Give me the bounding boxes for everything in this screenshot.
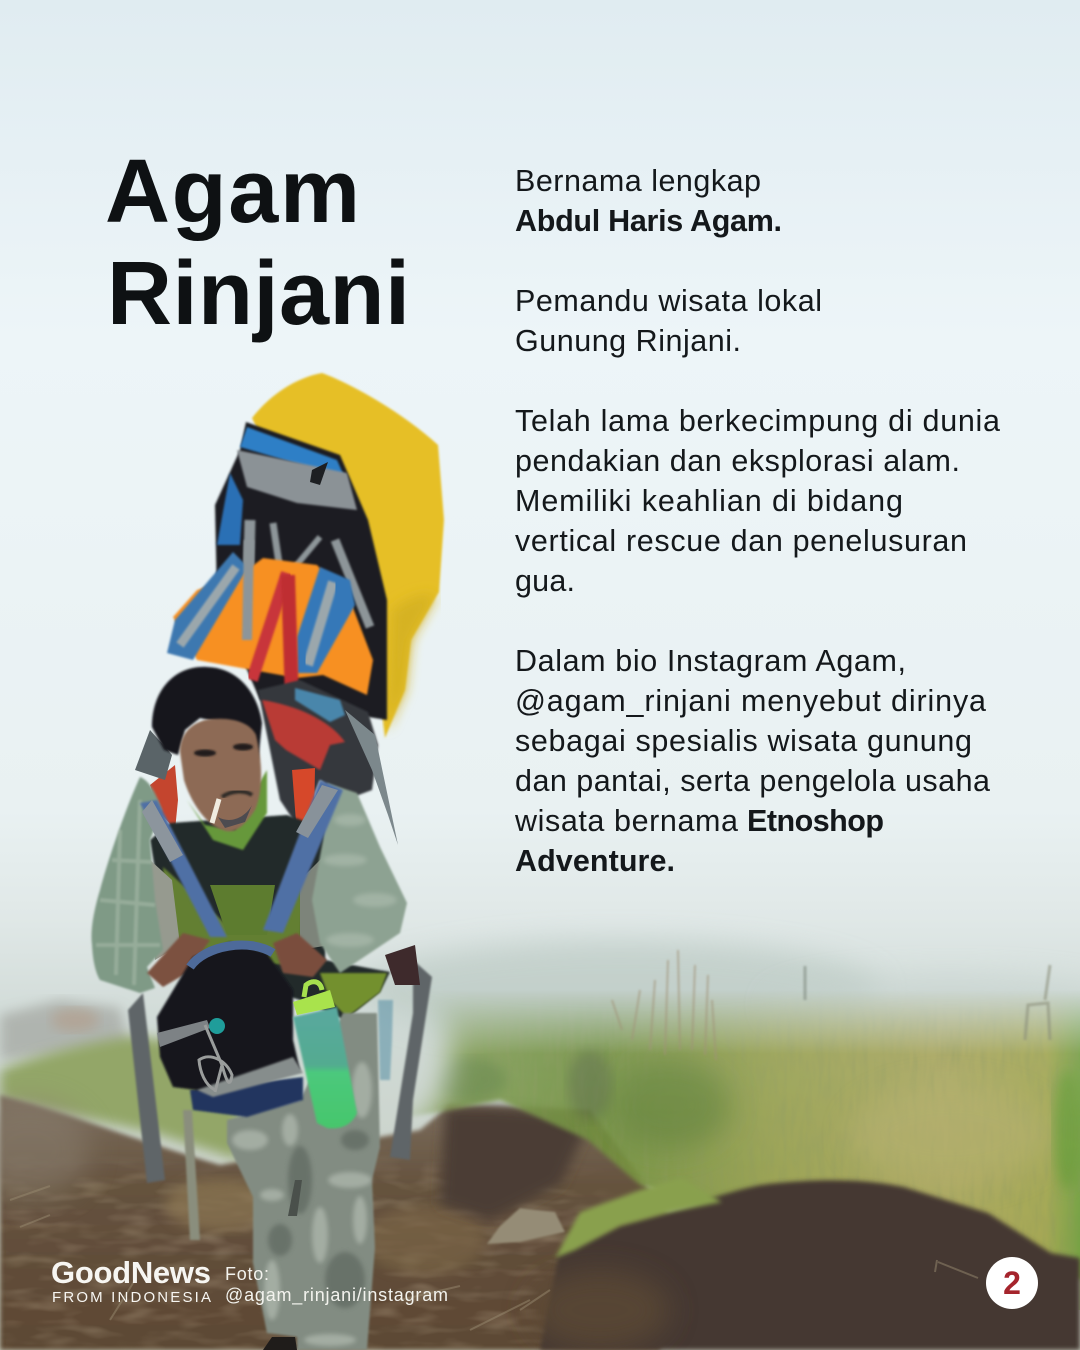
- distant trees: [0, 1000, 130, 1060]
- text block: full name: Abdul Haris Agam.: [515, 204, 782, 238]
- lower pack: [258, 680, 378, 830]
- text block: local guide: [515, 284, 822, 358]
- text block: full name: [515, 164, 782, 238]
- logo: GoodNews from Indonesia: GoodNews: [51, 1255, 211, 1290]
- left grass: [0, 1036, 240, 1160]
- cigarette: [212, 799, 219, 823]
- padded blue straps: [167, 552, 248, 660]
- text block: instagram bio: dan pantai, serta pengelola usaha: [515, 764, 990, 798]
- grass tuft: [555, 1178, 722, 1258]
- logo: GoodNews from Indonesia: FROM INDONESIA: [52, 1289, 211, 1306]
- text block: instagram bio: sebagai spesialis wisata gunung: [515, 724, 972, 758]
- hands: [147, 933, 210, 987]
- dry stalks: [612, 950, 1050, 1060]
- photo credit: [225, 1264, 448, 1306]
- text block: instagram bio: [514, 644, 990, 878]
- grey straps: [247, 520, 370, 640]
- background: mountain trail landscape: [0, 940, 1080, 1350]
- person in the background: [378, 1000, 393, 1080]
- upper pack body: [215, 422, 387, 720]
- text block: experience: [515, 404, 1000, 598]
- yellow rain cover: [252, 373, 444, 738]
- waist pack: [190, 1077, 303, 1117]
- text block: experience: gua.: [515, 564, 575, 598]
- main grass field: [400, 980, 1080, 1320]
- text block: instagram bio: Adventure.: [515, 844, 675, 878]
- fog bank: [360, 940, 880, 1040]
- title: [105, 142, 410, 344]
- rocks and twigs: [487, 1208, 565, 1244]
- text block: local guide: Gunung Rinjani.: [515, 324, 741, 358]
- page number badge: [986, 1257, 1038, 1309]
- photo: hiker with giant backpack: [91, 373, 444, 1350]
- text block: instagram bio: @agam_rinjani menyebut dirinya: [515, 684, 986, 718]
- text block: experience: vertical rescue dan penelusuran: [515, 524, 967, 558]
- text block: experience: Memiliki keahlian di bidang: [515, 484, 903, 518]
- shoe: [263, 1337, 297, 1350]
- orange pack: [173, 558, 373, 695]
- torso: jacket and green vest: [150, 815, 390, 1020]
- text block: local guide: Pemandu wisata lokal: [515, 284, 822, 318]
- text block: instagram bio: Dalam bio Instagram Agam,: [515, 644, 906, 678]
- text block: experience: pendakian dan eksplorasi alam.: [515, 444, 960, 478]
- text block: instagram bio: wisata bernama: [514, 804, 738, 838]
- photo credit: Foto:: [225, 1264, 269, 1284]
- side straps: [128, 993, 165, 1183]
- text block: instagram bio: Etnoshop: [747, 804, 884, 838]
- text block: full name: Bernama lengkap: [515, 164, 761, 198]
- head: face: [180, 719, 261, 831]
- green scarf: [187, 770, 267, 850]
- page number badge: 2: [1003, 1265, 1021, 1301]
- title: Rinjani: [107, 244, 410, 344]
- head: hair: [152, 667, 262, 762]
- logo: GoodNews from Indonesia: [51, 1255, 211, 1306]
- red straps: [252, 573, 287, 680]
- right arm sleeve: [312, 783, 407, 973]
- water bottle: [304, 982, 322, 997]
- drawcord and toggle: [199, 1025, 232, 1092]
- sleeping bag: [157, 942, 300, 1093]
- title: Agam: [105, 142, 360, 242]
- dirt mound: [540, 1180, 1080, 1350]
- blue shoulder straps: [140, 800, 227, 937]
- left arm plaid sleeve: [91, 777, 163, 993]
- text block: experience: Telah lama berkecimpung di dunia: [515, 404, 1000, 438]
- camo trousers: [227, 1013, 380, 1350]
- photo credit: @agam_rinjani/instagram: [225, 1285, 448, 1306]
- dirt trail: [0, 1095, 680, 1350]
